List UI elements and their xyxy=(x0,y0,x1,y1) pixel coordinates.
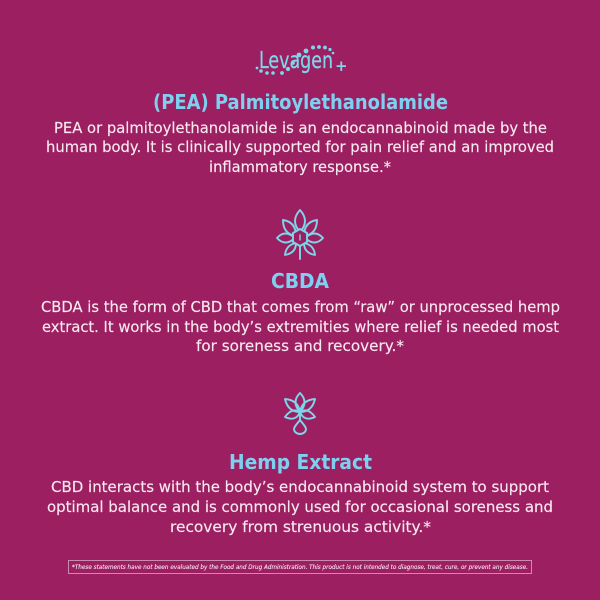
text: Hemp Extract description: optimal balance and is commonly used for occasional soreness and xyxy=(47,498,553,516)
text: CBDA description: CBDA is the form of CBD that comes from “raw” or unprocessed hemp xyxy=(41,298,560,316)
logo: Levagen+: Levagen xyxy=(259,48,333,74)
footnote: disclaimer box xyxy=(68,560,532,574)
icon: cannabis leaf with molecule hexagon xyxy=(277,210,323,259)
text: PEA description xyxy=(46,119,554,176)
text: CBDA description: for soreness and recovery.* xyxy=(196,337,404,355)
footnote: disclaimer box: *These statements have not been evaluated by the Food and Drug Administration. This product is not intended to diagnose, treat, cure, or prevent any disease. xyxy=(72,564,528,571)
text: Hemp Extract description: CBD interacts with the body’s endocannabinoid system to support xyxy=(51,478,549,496)
text: PEA description: inflammatory response.* xyxy=(209,158,391,176)
text: Hemp Extract description xyxy=(47,478,553,536)
text: PEA description: human body. It is clinically supported for pain relief and an improved xyxy=(46,138,554,156)
heading: PEA: (PEA) Palmitoylethanolamide xyxy=(153,90,448,114)
text: CBDA description: extract. It works in the body’s extremities where relief is needed most xyxy=(42,318,559,336)
heading: CBDA: CBDA xyxy=(271,269,329,293)
text: Hemp Extract description: recovery from strenuous activity.* xyxy=(170,518,431,536)
logo: Levagen+: + xyxy=(335,57,348,75)
icon: hemp leaf with droplet xyxy=(285,393,315,434)
text: CBDA description xyxy=(41,298,560,355)
text: PEA description: PEA or palmitoylethanolamide is an endocannabinoid made by the xyxy=(54,119,547,137)
heading: Hemp Extract: Hemp Extract xyxy=(229,450,372,474)
